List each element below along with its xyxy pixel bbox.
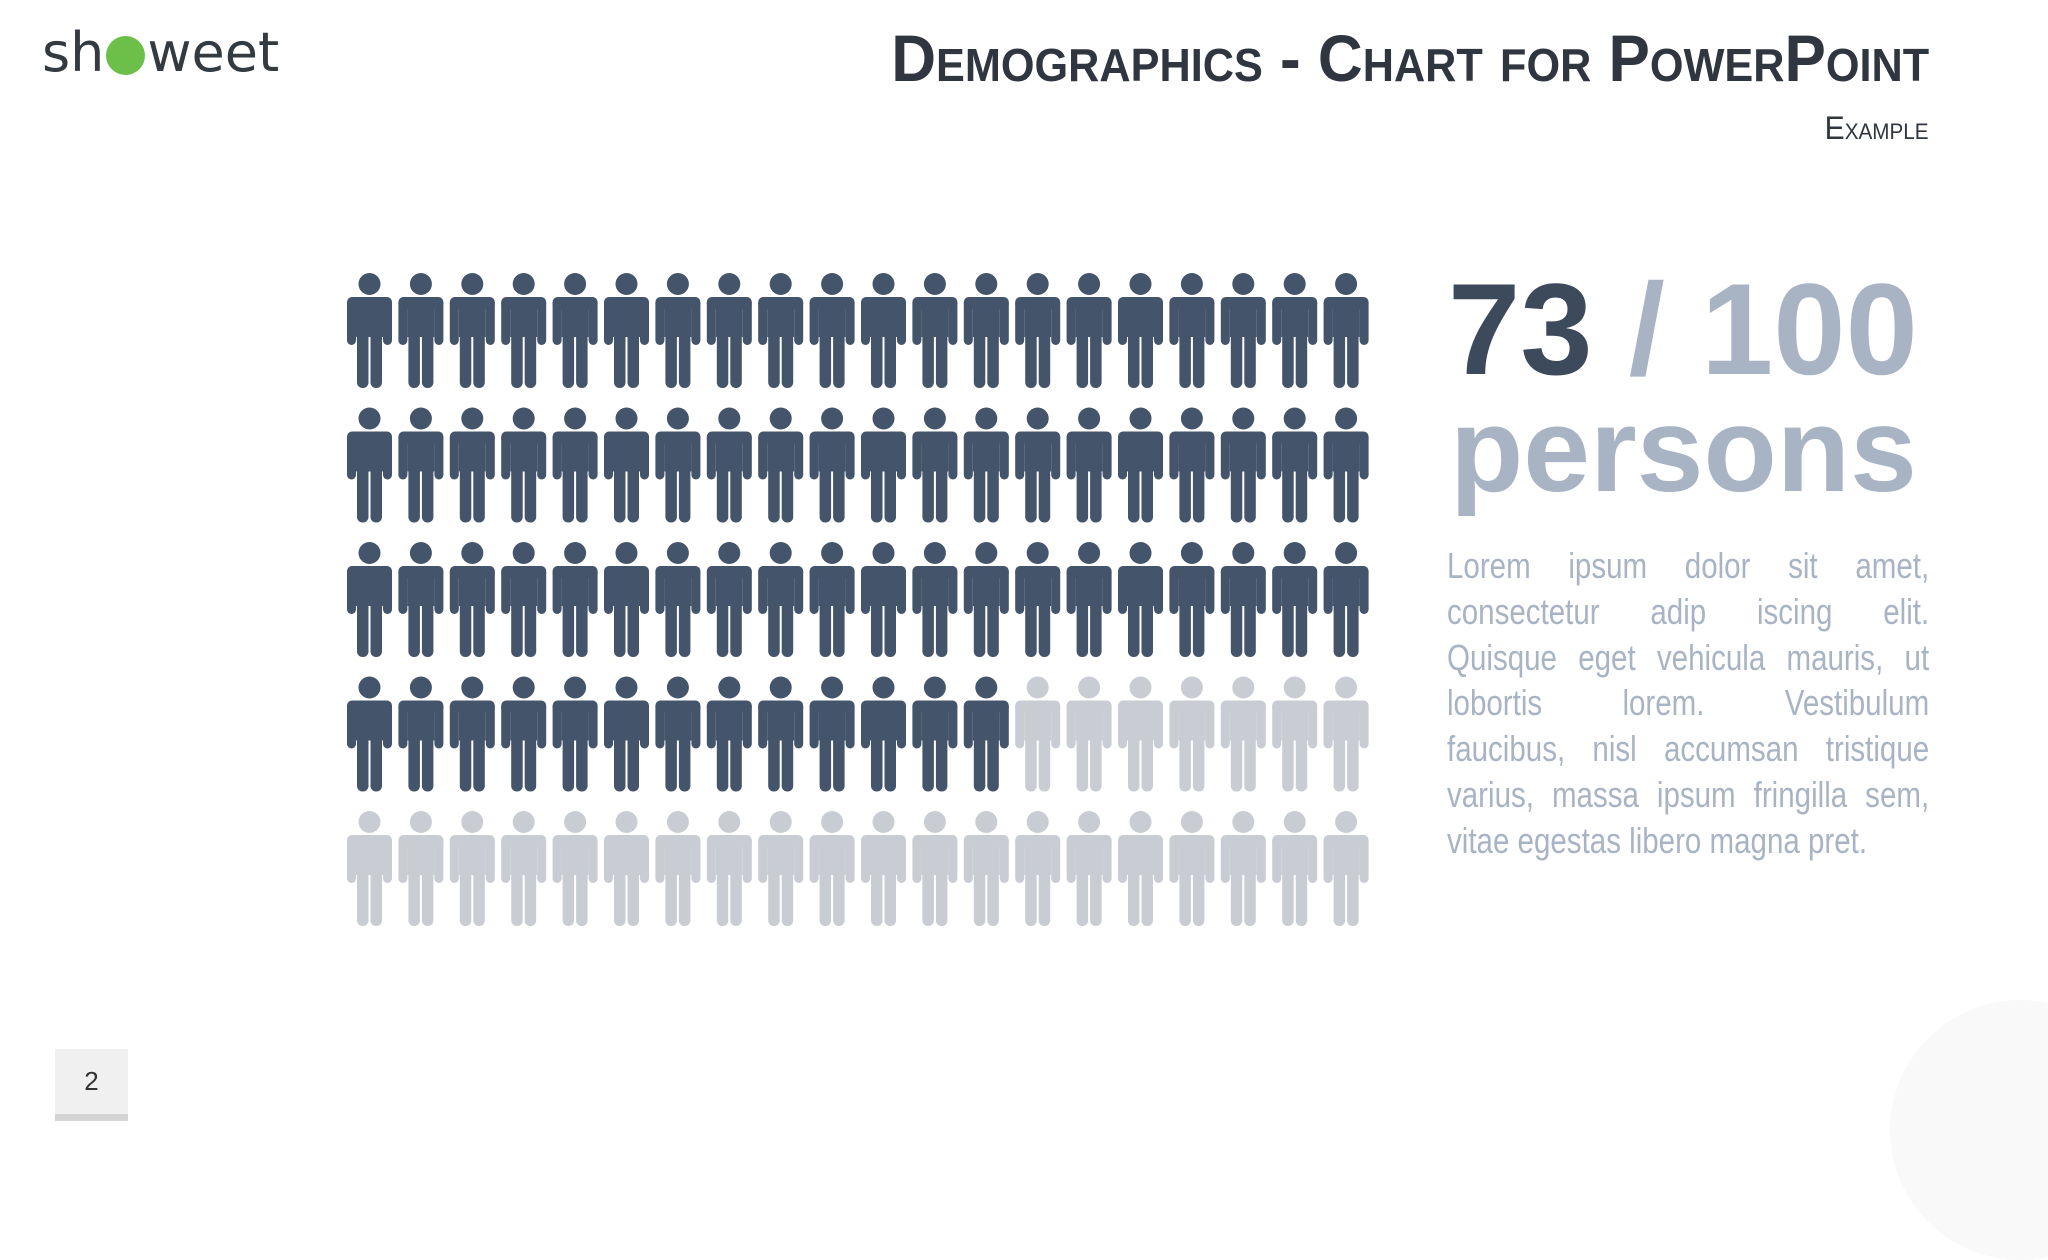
row 2 <box>347 408 1369 522</box>
description text <box>1447 545 1929 861</box>
title: Demographics - Chart for PowerPoint <box>891 21 1929 95</box>
description text: lobortis lorem. Vestibulum <box>1447 682 1929 723</box>
persons label: persons <box>1450 383 1917 517</box>
description text: vitae egestas libero magna pret. <box>1447 820 1867 861</box>
watermark <box>1890 1000 2048 1260</box>
row 3 <box>347 542 1369 657</box>
big stat: 73 / 100 <box>1448 256 1918 402</box>
page number <box>55 1049 128 1121</box>
row 1 <box>347 273 1369 388</box>
description text: Quisque eget vehicula mauris, ut <box>1447 637 1929 678</box>
row 5 <box>347 811 1369 926</box>
description text: varius, massa ipsum fringilla sem, <box>1447 774 1929 815</box>
description text: consectetur adip iscing elit. <box>1447 591 1929 632</box>
description text: faucibus, nisl accumsan tristique <box>1447 728 1929 769</box>
subtitle: Example <box>1825 110 1929 146</box>
description text: Lorem ipsum dolor sit amet, <box>1447 545 1929 586</box>
row 4 <box>347 676 1369 792</box>
page number: 2 <box>84 1066 99 1096</box>
logo: sh weet <box>42 21 279 84</box>
